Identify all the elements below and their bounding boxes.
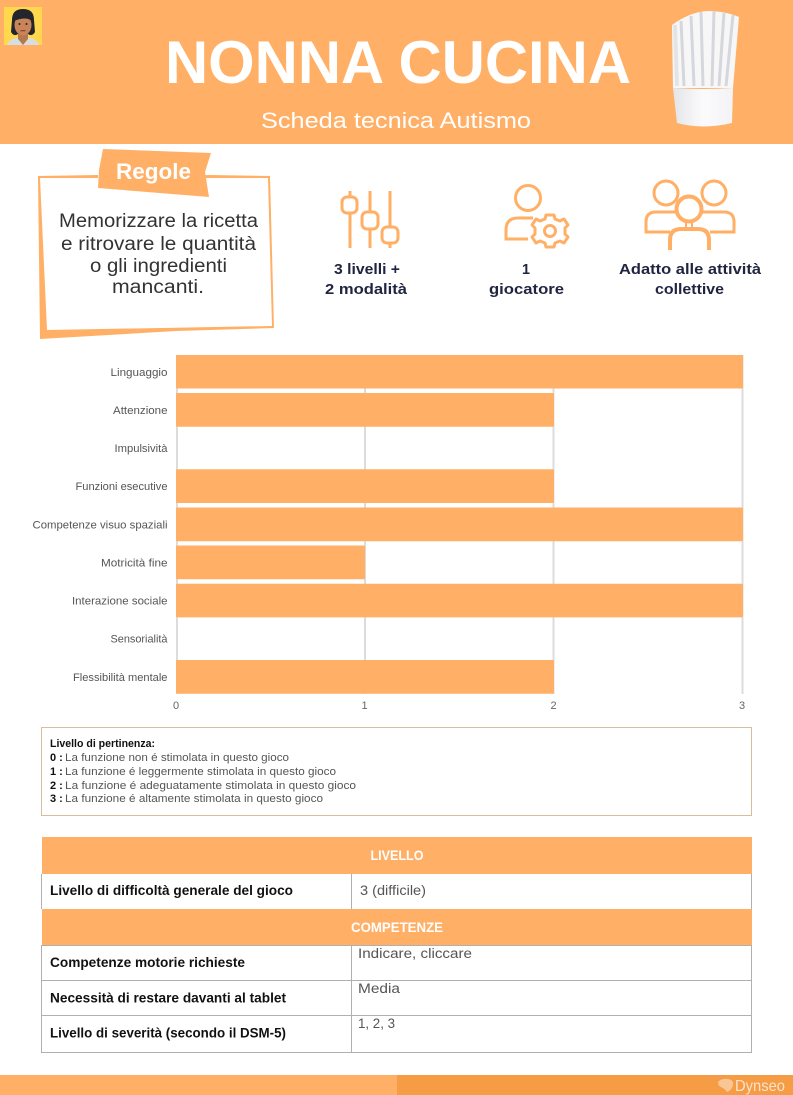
icon: group of people	[646, 181, 734, 250]
rules text: e ritrovare le quantità	[61, 234, 256, 255]
row labels: Livello di severità (secondo il DSM-5)	[50, 1026, 286, 1040]
row labels: Necessità di restare davanti al tablet	[50, 990, 287, 1006]
row labels: Livello di difficoltà generale del gioco	[50, 883, 293, 898]
players label: giocatore	[489, 281, 564, 298]
category labels: Interazione sociale	[72, 596, 168, 608]
row values: Media	[358, 981, 401, 996]
category labels: Attenzione	[113, 405, 168, 417]
category labels: Impulsività	[114, 443, 168, 455]
feature: group activities	[619, 181, 762, 298]
skills header: COMPETENZE	[351, 919, 443, 935]
legend entries: La funzione non é stimolata in questo gioco	[65, 752, 289, 764]
group label: collettive	[655, 281, 724, 298]
skills header	[42, 909, 752, 945]
feature: levels	[325, 191, 408, 298]
legend entries: La funzione é altamente stimolata in questo gioco	[65, 793, 323, 805]
rules tab	[98, 149, 211, 197]
category labels: Motricità fine	[101, 558, 168, 570]
category labels: Competenze visuo spaziali	[32, 520, 168, 532]
group label	[619, 261, 762, 298]
axis labels	[173, 700, 745, 712]
rules text	[59, 211, 258, 298]
category labels	[32, 367, 168, 684]
legend entries: La funzione é adeguatamente stimolata in questo gioco	[65, 780, 356, 792]
category labels: Funzioni esecutive	[76, 481, 168, 493]
icon: sliders	[342, 191, 398, 248]
title: NONNA CUCINA	[165, 29, 631, 96]
axis labels: 1	[361, 700, 368, 712]
row values: Indicare, cliccare	[358, 946, 472, 961]
axis labels: 3	[739, 700, 745, 712]
players label	[489, 261, 564, 298]
levels label: 3 livelli +	[334, 261, 400, 278]
players label: 1	[522, 261, 530, 278]
header banner	[0, 0, 793, 144]
rules text: Memorizzare la ricetta	[59, 211, 258, 232]
legend entries: 0 :	[50, 752, 63, 764]
category labels: Linguaggio	[110, 367, 168, 379]
icon: user with gear	[506, 186, 568, 247]
rules heading: Regole	[116, 159, 191, 184]
table: level and skills	[42, 837, 752, 1053]
row values	[358, 883, 472, 1031]
row labels: Competenze motorie richieste	[50, 955, 245, 970]
rules text: o gli ingredienti	[90, 256, 227, 277]
row labels	[50, 883, 293, 1040]
levels label: 2 modalità	[325, 281, 408, 298]
legend entries: La funzione é leggermente stimolata in questo gioco	[65, 766, 336, 778]
levels label	[325, 261, 408, 298]
axis labels: 2	[550, 700, 557, 712]
row values: 3 (difficile)	[360, 883, 426, 898]
row values: 1, 2, 3	[358, 1016, 395, 1031]
icon: grandmother avatar	[4, 7, 42, 45]
rules text: mancanti.	[112, 277, 204, 298]
level header	[42, 837, 752, 874]
icon: chef hat	[672, 11, 739, 126]
category labels: Sensorialità	[110, 634, 168, 646]
panel: rules	[38, 149, 274, 339]
category labels: Flessibilità mentale	[73, 672, 168, 684]
subtitle: Scheda tecnica Autismo	[261, 108, 531, 133]
group label: Adatto alle attività	[619, 261, 762, 278]
legend box	[42, 728, 752, 816]
legend entries: 1 :	[50, 766, 63, 778]
footer	[0, 1075, 793, 1095]
feature: players	[489, 186, 568, 298]
legend entries: 2 :	[50, 780, 63, 792]
bars	[176, 355, 743, 694]
bar chart	[32, 355, 745, 712]
logo text: Dynseo	[735, 1078, 785, 1095]
level header: LIVELLO	[370, 847, 424, 863]
legend entries	[50, 752, 356, 805]
icon: brain logo	[718, 1079, 733, 1092]
rules frame	[38, 175, 274, 339]
axis labels: 0	[173, 700, 179, 712]
legend entries: 3 :	[50, 793, 63, 805]
legend title: Livello di pertinenza:	[50, 738, 155, 750]
